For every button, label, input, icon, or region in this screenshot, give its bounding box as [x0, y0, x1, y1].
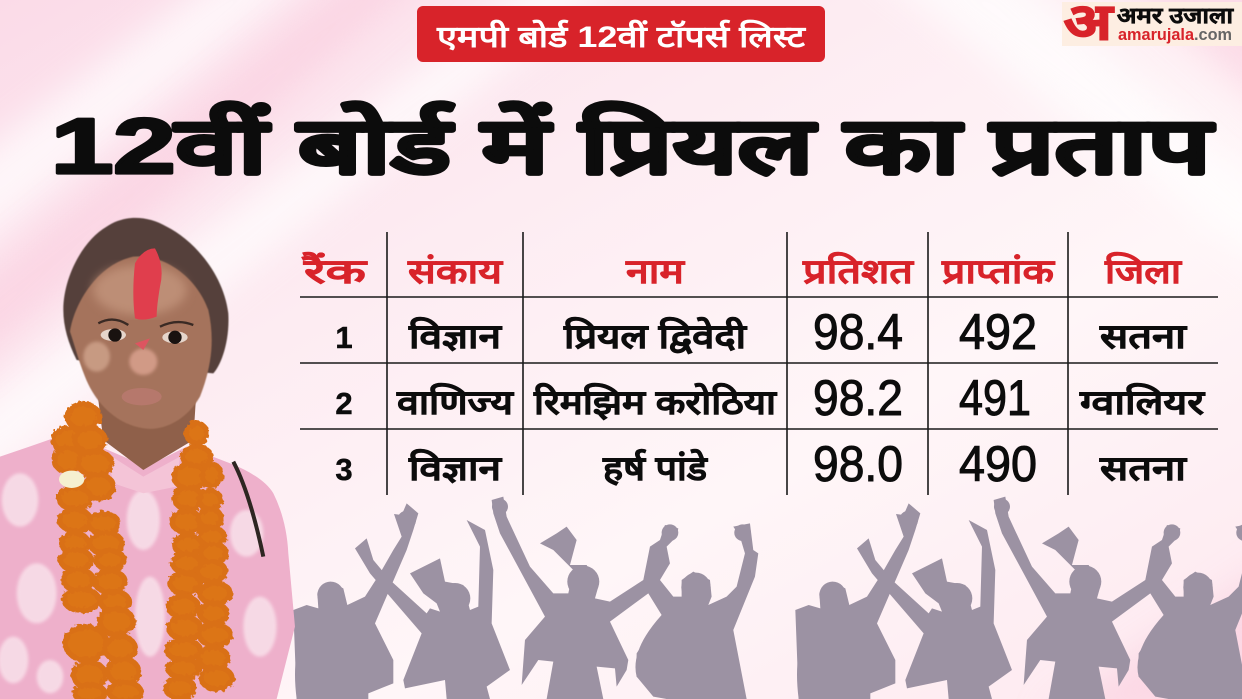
logo: Amar Ujala — [1062, 0, 1242, 50]
row 2: ग्वालियर — [1079, 382, 1205, 422]
braid — [233, 462, 263, 557]
row 3: 98.0 — [813, 436, 903, 492]
row 1: सतना — [1099, 318, 1187, 356]
row 2 — [335, 370, 1205, 426]
table header: संकाय — [407, 253, 504, 291]
garland — [53, 404, 232, 699]
row 2: 98.2 — [813, 370, 903, 426]
tag: red heading pill — [417, 6, 825, 62]
eyes — [101, 329, 126, 341]
logo: Amar Ujala: amarujala.com — [1118, 25, 1232, 44]
forehead highlight — [93, 265, 187, 315]
table — [300, 232, 1218, 495]
row 3: 3 — [335, 452, 353, 487]
table header: जिला — [1104, 251, 1182, 291]
title: 12वीं बोर्ड में प्रियल का प्रताप — [51, 101, 1215, 190]
row 3 — [335, 436, 1187, 492]
table header: प्रतिशत — [802, 251, 915, 291]
white flower — [59, 471, 84, 488]
row 3: विज्ञान — [408, 448, 502, 488]
row 2: 2 — [335, 386, 353, 421]
row 1: 98.4 — [813, 304, 903, 360]
row 1: प्रियल द्विवेदी — [563, 316, 747, 356]
table header — [300, 251, 1182, 291]
tag: red heading pill: एमपी बोर्ड 12वीं टॉपर्स लिस्ट — [436, 19, 807, 54]
table header: नाम — [625, 253, 686, 291]
tikka — [133, 248, 162, 320]
lips — [122, 388, 162, 405]
row 3: हर्ष पांडे — [602, 448, 709, 488]
row 1: विज्ञान — [408, 316, 502, 356]
table header: रैंक — [300, 251, 369, 291]
logo: Amar Ujala: अमर उजाला — [1117, 3, 1234, 28]
row 1: 1 — [335, 320, 353, 355]
silhouettes: dancing crowd — [293, 497, 1242, 699]
table header: प्राप्तांक — [941, 253, 1056, 291]
face — [70, 256, 212, 429]
cheek highlight — [83, 342, 110, 372]
hair — [63, 218, 228, 373]
photo: topper with marigold garland — [0, 218, 295, 699]
row 1: 492 — [959, 304, 1037, 360]
row 2: वाणिज्य — [396, 382, 514, 422]
table grid — [300, 232, 1218, 495]
row 2: 491 — [959, 370, 1031, 426]
row 2: रिमझिम करोठिया — [533, 382, 777, 422]
collar — [107, 453, 180, 493]
shirt pattern — [0, 473, 277, 693]
neck — [97, 387, 197, 470]
row 1 — [335, 304, 1187, 360]
row 3: 490 — [959, 436, 1037, 492]
shirt — [0, 438, 295, 699]
row 3: सतना — [1099, 450, 1187, 488]
